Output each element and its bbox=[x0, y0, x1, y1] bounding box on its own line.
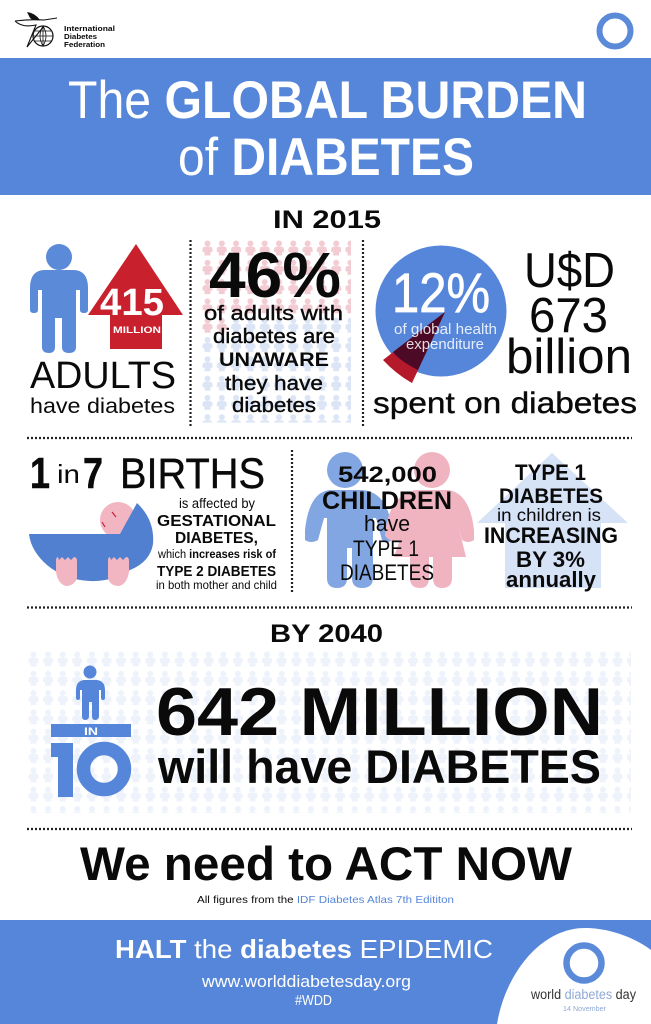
caption: diabetes bbox=[232, 395, 316, 417]
caption: of adults with bbox=[204, 303, 343, 325]
website: www.worlddiabetesday.org bbox=[201, 972, 411, 991]
heading: BIRTHS bbox=[120, 450, 265, 498]
world diabetes day badge: 14 November bbox=[563, 1004, 606, 1013]
panel: 415 million adults bbox=[30, 244, 183, 418]
IDF logo bbox=[15, 12, 115, 49]
title: The GLOBAL BURDEN bbox=[68, 71, 587, 130]
icon: boy bbox=[305, 452, 392, 588]
panel: 12 percent expenditure bbox=[373, 244, 637, 420]
heading: by 2040: BY 2040 bbox=[270, 620, 383, 648]
text: in children is bbox=[497, 505, 601, 525]
caption bbox=[204, 303, 343, 417]
panel: 2040 projection bbox=[27, 651, 631, 813]
text: children: 542,000 bbox=[338, 462, 437, 487]
IDF logo: International bbox=[64, 24, 115, 33]
amount: billion bbox=[506, 330, 632, 384]
hashtag: #WDD bbox=[295, 992, 332, 1009]
title: of DIABETES bbox=[178, 128, 474, 187]
wedge bbox=[383, 312, 445, 383]
header band bbox=[0, 58, 651, 195]
text: BY 3% bbox=[516, 547, 585, 572]
text: annually bbox=[506, 567, 597, 592]
caption: they have bbox=[225, 373, 323, 395]
icon: red arrow with number: MILLION bbox=[113, 325, 161, 335]
text: 642 million: 642 MILLION bbox=[156, 674, 603, 750]
heading: in bbox=[57, 459, 80, 489]
panel: children bbox=[305, 452, 474, 588]
call to action: We need to ACT NOW bbox=[80, 837, 573, 890]
text: children: TYPE 1 bbox=[353, 536, 419, 561]
text: adults: ADULTS bbox=[30, 355, 176, 397]
amount bbox=[506, 244, 632, 384]
source note: All figures from the IDF Diabetes Atlas 7th Edititon bbox=[197, 894, 454, 906]
text: INCREASING bbox=[484, 523, 618, 548]
IDF logo: Diabetes bbox=[64, 32, 97, 41]
caption: diabetes are bbox=[213, 326, 335, 348]
panel: births bbox=[29, 449, 277, 592]
text: children: DIABETES bbox=[340, 560, 434, 585]
icon: baby in cradle bbox=[29, 502, 153, 586]
big number: 46% bbox=[209, 239, 341, 311]
world diabetes day badge bbox=[497, 928, 651, 1024]
text: TYPE 1 bbox=[515, 460, 586, 485]
text: gestational diabetes: in both mother and child bbox=[156, 578, 277, 592]
text: gestational diabetes: which increases risk of bbox=[157, 549, 276, 561]
text: children bbox=[322, 462, 452, 585]
IDF logo: Federation bbox=[64, 40, 105, 49]
icon: adult figure bbox=[30, 244, 88, 353]
heading: 7 bbox=[83, 449, 103, 498]
icon: 1 in 10 bbox=[51, 666, 131, 797]
text: gestational diabetes: DIABETES, bbox=[175, 530, 258, 547]
caption: UNAWARE bbox=[219, 350, 329, 371]
text: children: have bbox=[364, 511, 410, 536]
spent text: spent on diabetes bbox=[373, 387, 637, 420]
panel: type 1 increasing bbox=[477, 453, 628, 592]
text: gestational diabetes: TYPE 2 DIABETES bbox=[157, 563, 276, 580]
text: gestational diabetes bbox=[156, 496, 277, 592]
text bbox=[484, 460, 618, 592]
world diabetes day badge: world diabetes day bbox=[530, 987, 636, 1002]
text: have diabetes: have diabetes bbox=[30, 395, 175, 418]
title bbox=[68, 71, 587, 187]
caption bbox=[394, 321, 497, 353]
footer band bbox=[0, 920, 651, 1024]
person pattern bbox=[201, 240, 351, 422]
heading bbox=[30, 449, 265, 498]
text: will have diabetes: will have DIABETES bbox=[157, 740, 601, 793]
icon: girl bbox=[385, 452, 474, 588]
background person pattern bbox=[27, 651, 631, 813]
footer slogan: HALT the diabetes EPIDEMIC bbox=[115, 934, 493, 964]
icon: red arrow with number: 415 bbox=[100, 282, 164, 324]
heading: in 2015: IN 2015 bbox=[273, 206, 381, 234]
heading: 1 bbox=[30, 449, 50, 498]
icon: blue ring top right bbox=[600, 16, 630, 46]
pie circle bbox=[376, 246, 506, 376]
caption: expenditure bbox=[406, 336, 484, 353]
icon: red arrow with number bbox=[88, 244, 183, 349]
icon: pale arrow bbox=[477, 453, 628, 588]
text: gestational diabetes: GESTATIONAL bbox=[157, 513, 276, 530]
icon: 1 in 10: IN bbox=[84, 726, 98, 738]
panel: 46 percent unaware bbox=[201, 239, 351, 422]
amount: U$D bbox=[524, 244, 615, 298]
percent: 12% bbox=[392, 261, 490, 324]
text: gestational diabetes: is affected by bbox=[179, 496, 255, 511]
amount: 673 bbox=[529, 289, 608, 343]
caption: of global health bbox=[394, 321, 497, 338]
text: DIABETES bbox=[499, 485, 603, 508]
text: children: CHILDREN bbox=[322, 487, 452, 515]
